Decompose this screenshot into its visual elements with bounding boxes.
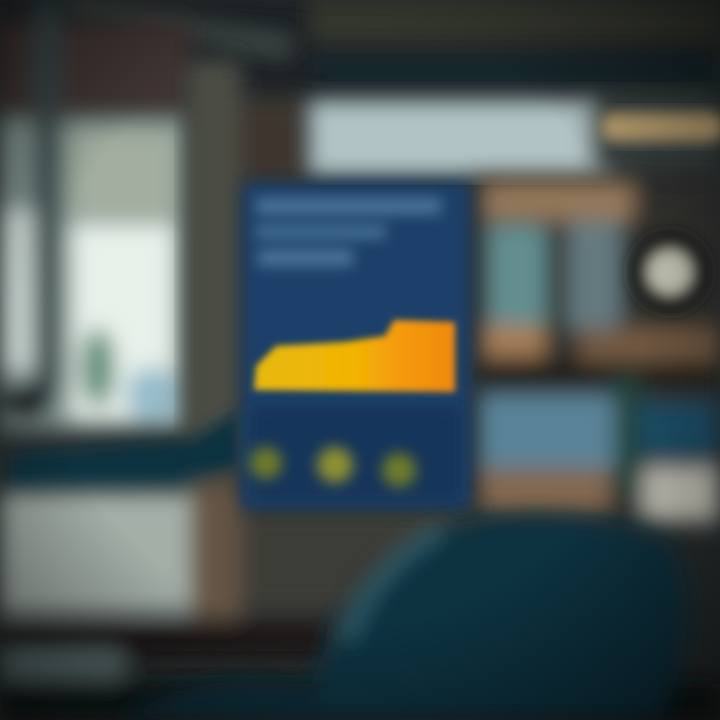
upper white wall bbox=[308, 90, 720, 176]
teal bench bbox=[10, 410, 240, 492]
round wall mirror bbox=[630, 232, 710, 312]
infographic board bbox=[242, 182, 470, 508]
blurred heading lines bbox=[256, 198, 441, 266]
foreground teal chair bbox=[120, 515, 687, 720]
lower left table bbox=[0, 480, 720, 720]
board panel bbox=[242, 182, 470, 508]
pendant lamp bbox=[600, 112, 720, 142]
right shelves bbox=[476, 178, 720, 523]
pillar beside board bbox=[186, 60, 302, 480]
left window bbox=[0, 0, 190, 430]
three stat icons bbox=[250, 447, 416, 487]
ceiling beams bbox=[0, 0, 720, 95]
yellow area chart bbox=[254, 320, 455, 392]
board lower shade bbox=[250, 405, 462, 501]
